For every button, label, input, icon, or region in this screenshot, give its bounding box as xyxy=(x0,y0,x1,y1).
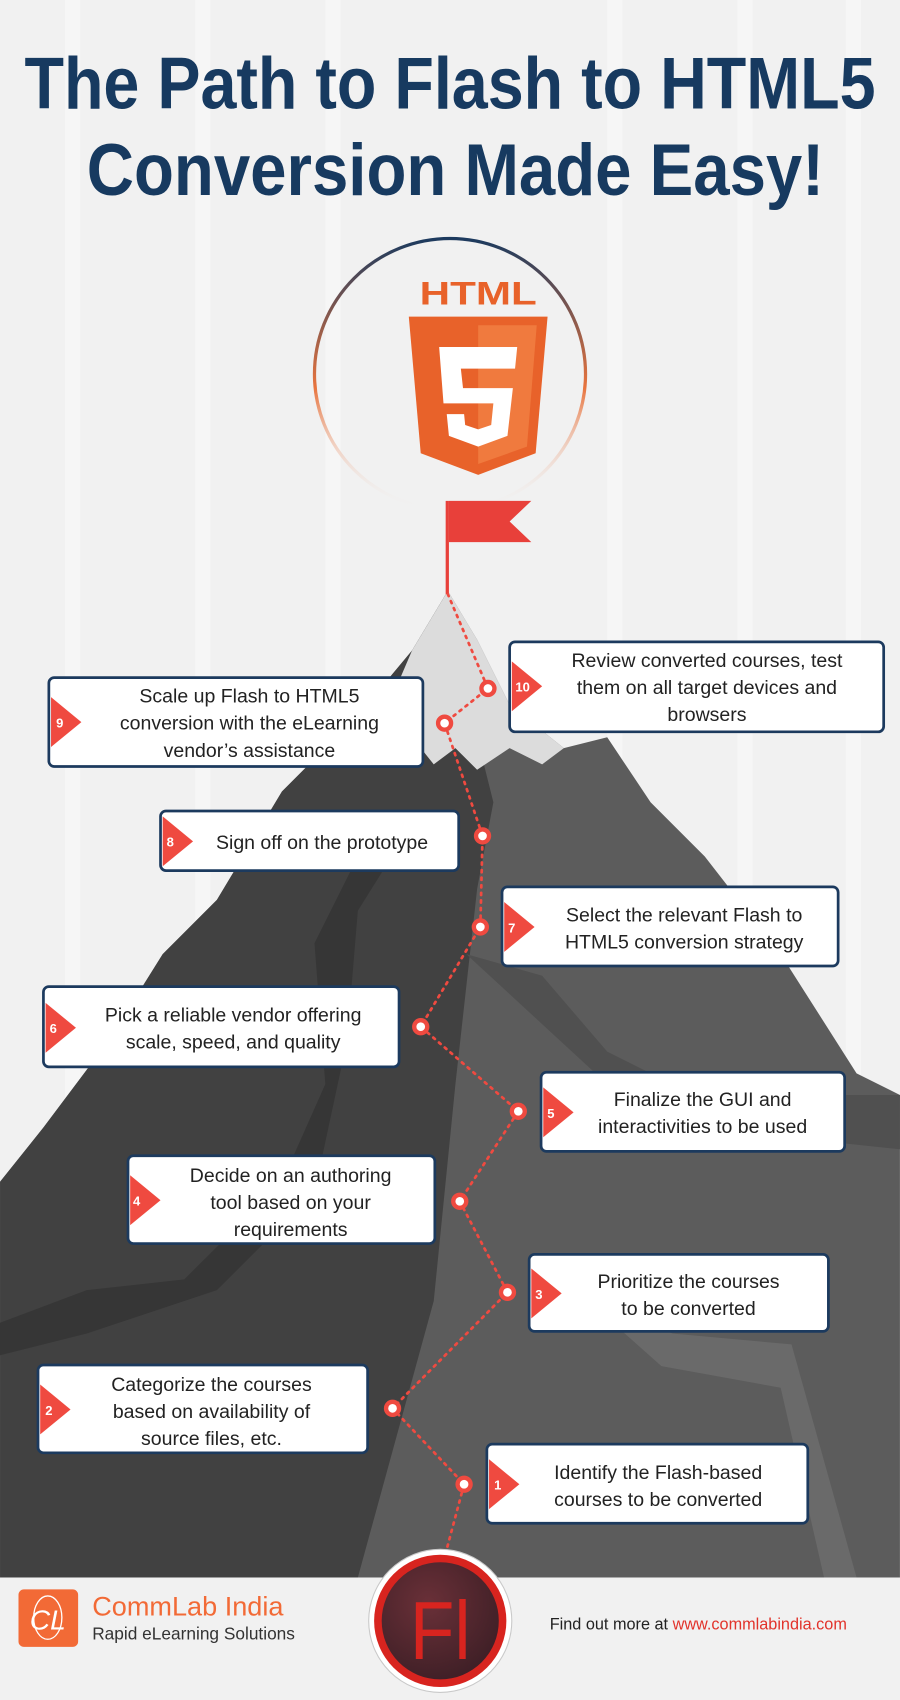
step 6: scale, speed, and quality xyxy=(126,1031,341,1053)
logo: CommLab India xyxy=(18,1589,295,1647)
step 9 xyxy=(49,678,423,767)
step 8 xyxy=(161,811,459,871)
step 3 xyxy=(529,1254,828,1331)
footer band xyxy=(0,1577,900,1700)
step 7: Select the relevant Flash to xyxy=(566,905,802,927)
step 1: courses to be converted xyxy=(554,1489,762,1511)
step 6: 6 xyxy=(50,1021,57,1036)
icon: HTML5 ring xyxy=(314,239,586,510)
step 2: source files, etc. xyxy=(141,1428,282,1450)
step 2: Categorize the courses xyxy=(111,1374,312,1396)
step 1: 1 xyxy=(494,1478,501,1493)
step 2: 2 xyxy=(45,1403,52,1418)
step 10: them on all target devices and xyxy=(577,677,837,699)
step 10: browsers xyxy=(667,704,747,726)
icon: flag xyxy=(446,501,531,594)
title xyxy=(24,41,876,211)
title: Conversion Made Easy! xyxy=(87,128,824,211)
step 10: 10 xyxy=(515,680,530,695)
step 4 xyxy=(128,1156,435,1244)
dotted path xyxy=(393,594,518,1577)
step 5 xyxy=(541,1072,845,1151)
step 3: 3 xyxy=(535,1287,543,1302)
step 1 xyxy=(487,1444,808,1523)
step 4: 4 xyxy=(133,1194,141,1209)
step 8: 8 xyxy=(167,835,174,850)
footer link text: Find out more at www.commlabindia.com xyxy=(550,1616,847,1634)
step 8: Sign off on the prototype xyxy=(216,832,428,854)
step 4: requirements xyxy=(234,1219,348,1241)
step 9: Scale up Flash to HTML5 xyxy=(139,686,360,708)
step 6: Pick a reliable vendor offering xyxy=(105,1004,361,1026)
step 2: based on availability of xyxy=(113,1401,311,1423)
step 9: conversion with the eLearning xyxy=(120,713,379,735)
step 5: interactivities to be used xyxy=(598,1116,807,1138)
step 4: Decide on an authoring xyxy=(190,1165,391,1187)
step 10 xyxy=(510,642,884,732)
icon: Flash logo xyxy=(369,1549,512,1692)
icon: HTML5 shield xyxy=(409,276,548,475)
path dots xyxy=(386,682,525,1491)
step 3: Prioritize the courses xyxy=(597,1271,780,1293)
step 1: Identify the Flash-based xyxy=(554,1462,762,1484)
step 3: to be converted xyxy=(621,1298,756,1320)
step 7 xyxy=(502,887,838,966)
logo: CommLab India: CL xyxy=(30,1604,66,1636)
step 5: 5 xyxy=(547,1106,554,1121)
logo: CommLab India: CommLab India xyxy=(92,1590,284,1621)
step 9: 9 xyxy=(56,715,63,730)
step 9: vendor’s assistance xyxy=(164,740,335,762)
step 6 xyxy=(43,987,399,1067)
icon: Flash logo: Fl xyxy=(410,1585,471,1677)
step 4: tool based on your xyxy=(210,1192,371,1214)
step 7: 7 xyxy=(508,920,515,935)
step 5: Finalize the GUI and xyxy=(614,1089,791,1111)
logo: CommLab India: Rapid eLearning Solutions xyxy=(92,1623,295,1643)
icon: HTML5 shield: HTML xyxy=(420,276,537,312)
step 10: Review converted courses, test xyxy=(571,650,843,672)
step 7: HTML5 conversion strategy xyxy=(565,932,804,954)
mountain xyxy=(0,591,900,1577)
step 2 xyxy=(38,1365,368,1453)
